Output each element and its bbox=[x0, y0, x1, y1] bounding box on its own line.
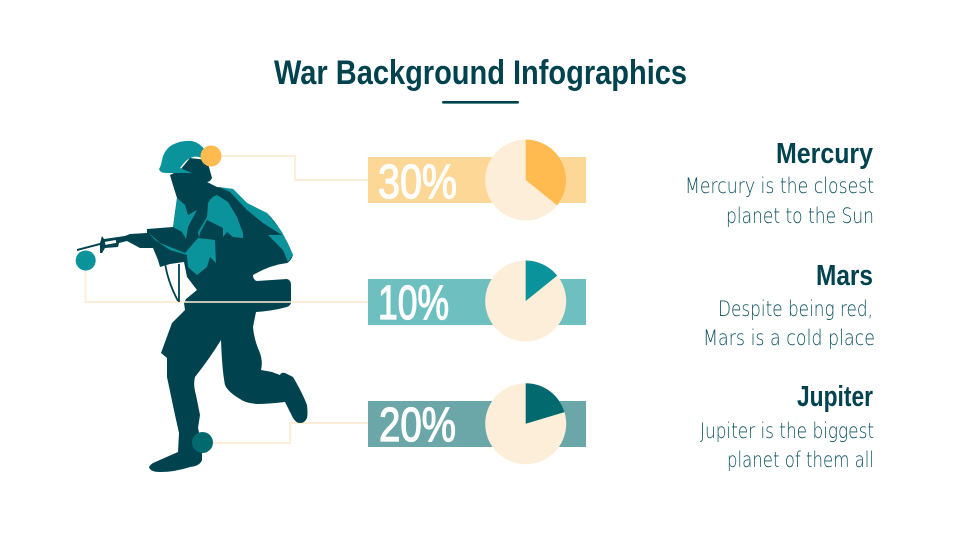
row: 30% bbox=[368, 140, 586, 220]
connector: rifle to 10% bbox=[86, 260, 368, 302]
pie chart bbox=[485, 383, 566, 464]
value: 30% bbox=[378, 156, 457, 209]
row: 10% bbox=[368, 260, 586, 342]
row: 20% bbox=[368, 383, 586, 464]
soldier rifle gap bbox=[105, 240, 116, 245]
description line 2: planet of them all bbox=[727, 448, 874, 472]
description: Mercury is the closest bbox=[685, 174, 874, 198]
soldier rifle strap bbox=[165, 262, 179, 302]
value: 10% bbox=[378, 277, 449, 330]
pie chart bbox=[485, 260, 566, 342]
soldier forearm highlight bbox=[148, 232, 216, 275]
connector: helmet to 30% bbox=[211, 156, 368, 180]
text block: Mars bbox=[703, 260, 875, 350]
description: Jupiter is the biggest bbox=[700, 419, 874, 443]
bar bbox=[368, 157, 586, 203]
soldier body bbox=[77, 158, 308, 472]
marker: boot dot bbox=[192, 432, 213, 453]
description line 2: Mars is a cold place bbox=[703, 326, 875, 350]
pie chart bbox=[485, 140, 566, 220]
soldier chest highlight bbox=[173, 198, 197, 239]
heading: Jupiter bbox=[797, 381, 873, 413]
value: 20% bbox=[379, 399, 456, 452]
heading: Mercury bbox=[776, 138, 873, 170]
connector: light line across soldier bbox=[184, 301, 291, 303]
marker: helmet dot bbox=[200, 146, 222, 166]
title: War Background Infographics bbox=[274, 54, 687, 92]
bar bbox=[368, 401, 586, 447]
soldier silhouette bbox=[77, 141, 308, 472]
description line 2: planet to the Sun bbox=[726, 204, 874, 228]
marker: rifle dot bbox=[76, 250, 96, 270]
bar bbox=[368, 279, 586, 325]
text block: Jupiter bbox=[700, 381, 874, 472]
heading: Mars bbox=[816, 260, 873, 292]
soldier backpack highlight bbox=[219, 187, 293, 262]
title underline bbox=[442, 101, 519, 104]
description: Despite being red, bbox=[718, 297, 873, 321]
soldier helmet bbox=[159, 141, 205, 173]
text block: Mercury bbox=[685, 138, 874, 228]
connector: boot to 20% bbox=[203, 423, 368, 443]
soldier shoulder highlight bbox=[198, 195, 243, 238]
